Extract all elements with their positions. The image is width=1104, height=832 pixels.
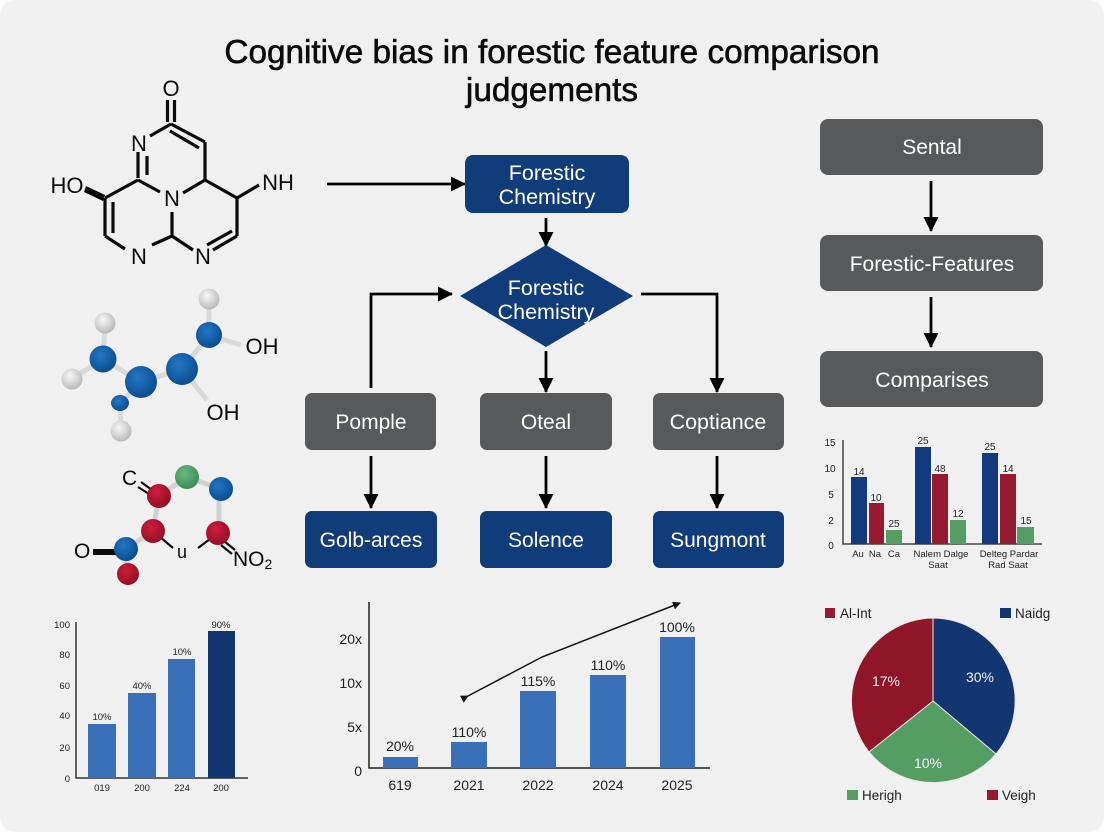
pie labels: 17% xyxy=(872,673,900,689)
legend: Al-Int xyxy=(840,606,872,621)
bar value labels: 10% xyxy=(92,712,112,723)
box: Solence xyxy=(480,511,612,568)
molecule: ball and stick with hydroxyl groups: OH xyxy=(206,400,240,425)
x axis labels xyxy=(852,549,1038,571)
decision diamond: Forestic Chemistry xyxy=(460,245,633,347)
bars: group 3: 14 xyxy=(1002,464,1014,475)
molecule: nitro compound: u xyxy=(177,542,187,562)
arrow: Sental to Forestic-Features xyxy=(930,181,932,231)
x axis labels: Delteg Pardar xyxy=(980,549,1038,560)
bars: group 3: 25 xyxy=(984,442,996,453)
y axis labels: 2 xyxy=(828,516,834,527)
box: Forestic-Features: Forestic-Features xyxy=(850,253,1014,276)
title: judgements xyxy=(465,72,638,109)
y axis labels: 15 xyxy=(824,438,836,449)
bars: group 1: 14 xyxy=(853,467,865,478)
bars: group 2: 48 xyxy=(934,464,946,475)
box: Comparises: Comparises xyxy=(875,368,989,392)
x axis labels: 224 xyxy=(174,783,190,794)
molecule: nitro compound: 2 xyxy=(264,556,272,572)
y axis labels: 10 xyxy=(824,464,836,475)
bar value labels xyxy=(92,620,231,723)
box: Comparises xyxy=(820,351,1043,407)
x axis labels xyxy=(388,777,693,793)
arrow: Oteal to Solence xyxy=(545,456,547,508)
x axis labels: Ca xyxy=(888,549,901,560)
box: Forestic Chemistry: Chemistry xyxy=(499,185,596,209)
decision diamond: Forestic Chemistry: Chemistry xyxy=(498,300,595,324)
y axis labels: 60 xyxy=(59,681,70,692)
arrow: diamond to Coptiance xyxy=(641,294,717,392)
y axis labels xyxy=(339,631,362,779)
box: Coptiance: Coptiance xyxy=(670,410,766,434)
arrow: Forestic-Features to Comparises xyxy=(930,297,932,347)
x axis labels: Rad Saat xyxy=(988,560,1028,571)
molecule: nitro compound: O xyxy=(74,540,90,563)
x axis labels: 2024 xyxy=(592,777,624,793)
bars xyxy=(88,631,235,778)
box: Sental xyxy=(820,119,1043,175)
y axis labels xyxy=(824,438,836,552)
box: Sental: Sental xyxy=(902,136,962,159)
x axis labels: 619 xyxy=(388,777,412,793)
molecule: nitro compound xyxy=(74,465,272,585)
box: Forestic-Features xyxy=(820,235,1043,291)
flowchart: central pathway xyxy=(305,155,784,568)
pie slices xyxy=(851,618,1015,783)
pie labels: 30% xyxy=(966,669,994,685)
grouped bar chart xyxy=(824,436,1042,571)
molecule: fused ring structure: N xyxy=(195,244,211,269)
title xyxy=(224,34,880,109)
bar chart: lower centre with trend arrow xyxy=(339,602,710,793)
arrow: molecule to top box xyxy=(327,183,465,185)
y axis labels: 5 xyxy=(828,490,834,501)
y axis labels: 20 xyxy=(59,743,70,754)
bar value labels: 115% xyxy=(521,673,555,689)
trend arrow xyxy=(468,603,680,696)
x axis labels: 200 xyxy=(213,783,229,794)
box: Forestic Chemistry xyxy=(465,155,629,213)
y axis labels: 0 xyxy=(828,541,834,552)
box: Golb-arces: Golb-arces xyxy=(320,529,422,552)
arrow: Pomple up to diamond xyxy=(371,294,452,388)
title: Cognitive bias in forestic feature comparison xyxy=(224,34,880,71)
legend xyxy=(825,606,1050,803)
y axis labels: 0 xyxy=(354,763,362,779)
bar value labels xyxy=(386,619,695,754)
molecule: fused ring structure xyxy=(50,76,294,269)
y axis labels: 5x xyxy=(347,719,362,735)
bars: group 1: 25 xyxy=(888,519,900,530)
arrow: Pomple to Golb-arces xyxy=(370,456,372,508)
molecule: fused ring structure: N xyxy=(131,244,147,269)
y axis labels: 80 xyxy=(59,650,70,661)
molecule: ball and stick with hydroxyl groups xyxy=(62,288,278,442)
y axis labels: 40 xyxy=(59,711,70,722)
x axis labels: Na xyxy=(869,549,882,560)
box: Forestic Chemistry: Forestic xyxy=(509,161,585,185)
decision diamond: Forestic Chemistry: Forestic xyxy=(508,276,584,300)
y axis labels: 20x xyxy=(339,631,362,647)
box: Pomple xyxy=(305,393,436,450)
x axis labels: 2025 xyxy=(661,777,693,793)
y axis labels: 10x xyxy=(339,675,362,691)
bars: group 3 xyxy=(982,442,1034,544)
x axis labels: 2021 xyxy=(453,777,485,793)
y axis labels xyxy=(54,620,70,785)
box: Golb-arces xyxy=(305,511,437,568)
x axis labels: Au xyxy=(852,549,864,560)
x axis labels: Saat xyxy=(928,560,948,571)
arrow: diamond to Oteal xyxy=(545,351,547,392)
bars: group 3: 15 xyxy=(1020,516,1032,527)
box: Solence: Solence xyxy=(508,529,584,552)
bars: group 2 xyxy=(915,436,966,544)
x axis labels: Nalem Dalge xyxy=(914,549,968,560)
box: Pomple: Pomple xyxy=(335,411,407,434)
molecule: fused ring structure: O xyxy=(162,76,180,101)
x axis labels: 200 xyxy=(134,783,150,794)
flowchart: right column xyxy=(820,119,1043,407)
box: Sungmont: Sungmont xyxy=(670,529,766,552)
bar value labels: 90% xyxy=(211,620,231,631)
bar value labels: 110% xyxy=(452,724,486,740)
x axis labels xyxy=(94,783,229,794)
bar value labels: 100% xyxy=(659,619,695,635)
legend: Herigh xyxy=(862,788,902,803)
arrow: box to diamond xyxy=(545,218,547,246)
bar value labels: 110% xyxy=(591,657,625,673)
molecule: fused ring structure: NH xyxy=(262,170,294,195)
arrow: Coptiance to Sungmont xyxy=(716,456,718,508)
molecule: fused ring structure: HO xyxy=(50,173,84,198)
pie labels: 10% xyxy=(914,755,942,771)
molecule: ball and stick with hydroxyl groups: OH xyxy=(246,334,278,359)
molecule: fused ring structure: N xyxy=(164,186,180,211)
molecule: nitro compound: C xyxy=(122,467,137,490)
box: Oteal: Oteal xyxy=(521,411,571,434)
legend: Naidg xyxy=(1015,606,1050,621)
y axis labels: 0 xyxy=(65,774,70,785)
x axis labels: 2022 xyxy=(522,777,554,793)
bar value labels: 10% xyxy=(172,647,192,658)
y axis labels: 100 xyxy=(54,620,70,631)
x axis labels: 019 xyxy=(94,783,110,794)
box: Oteal xyxy=(480,393,612,450)
bar chart: lower left xyxy=(54,620,248,794)
bars: group 2: 25 xyxy=(917,436,929,447)
bar value labels: 40% xyxy=(132,681,152,692)
bars: group 2: 12 xyxy=(952,509,964,520)
bar value labels: 20% xyxy=(386,738,414,754)
bars: group 1: 10 xyxy=(870,493,882,504)
pie chart with legend xyxy=(825,606,1050,803)
legend: Veigh xyxy=(1002,788,1036,803)
box: Coptiance xyxy=(653,393,784,450)
bars: group 1 xyxy=(851,467,902,544)
pie labels xyxy=(872,669,994,771)
molecule: fused ring structure: N xyxy=(131,131,147,156)
box: Sungmont xyxy=(653,511,784,568)
bars xyxy=(383,637,695,768)
molecule: nitro compound: NO xyxy=(233,548,264,571)
